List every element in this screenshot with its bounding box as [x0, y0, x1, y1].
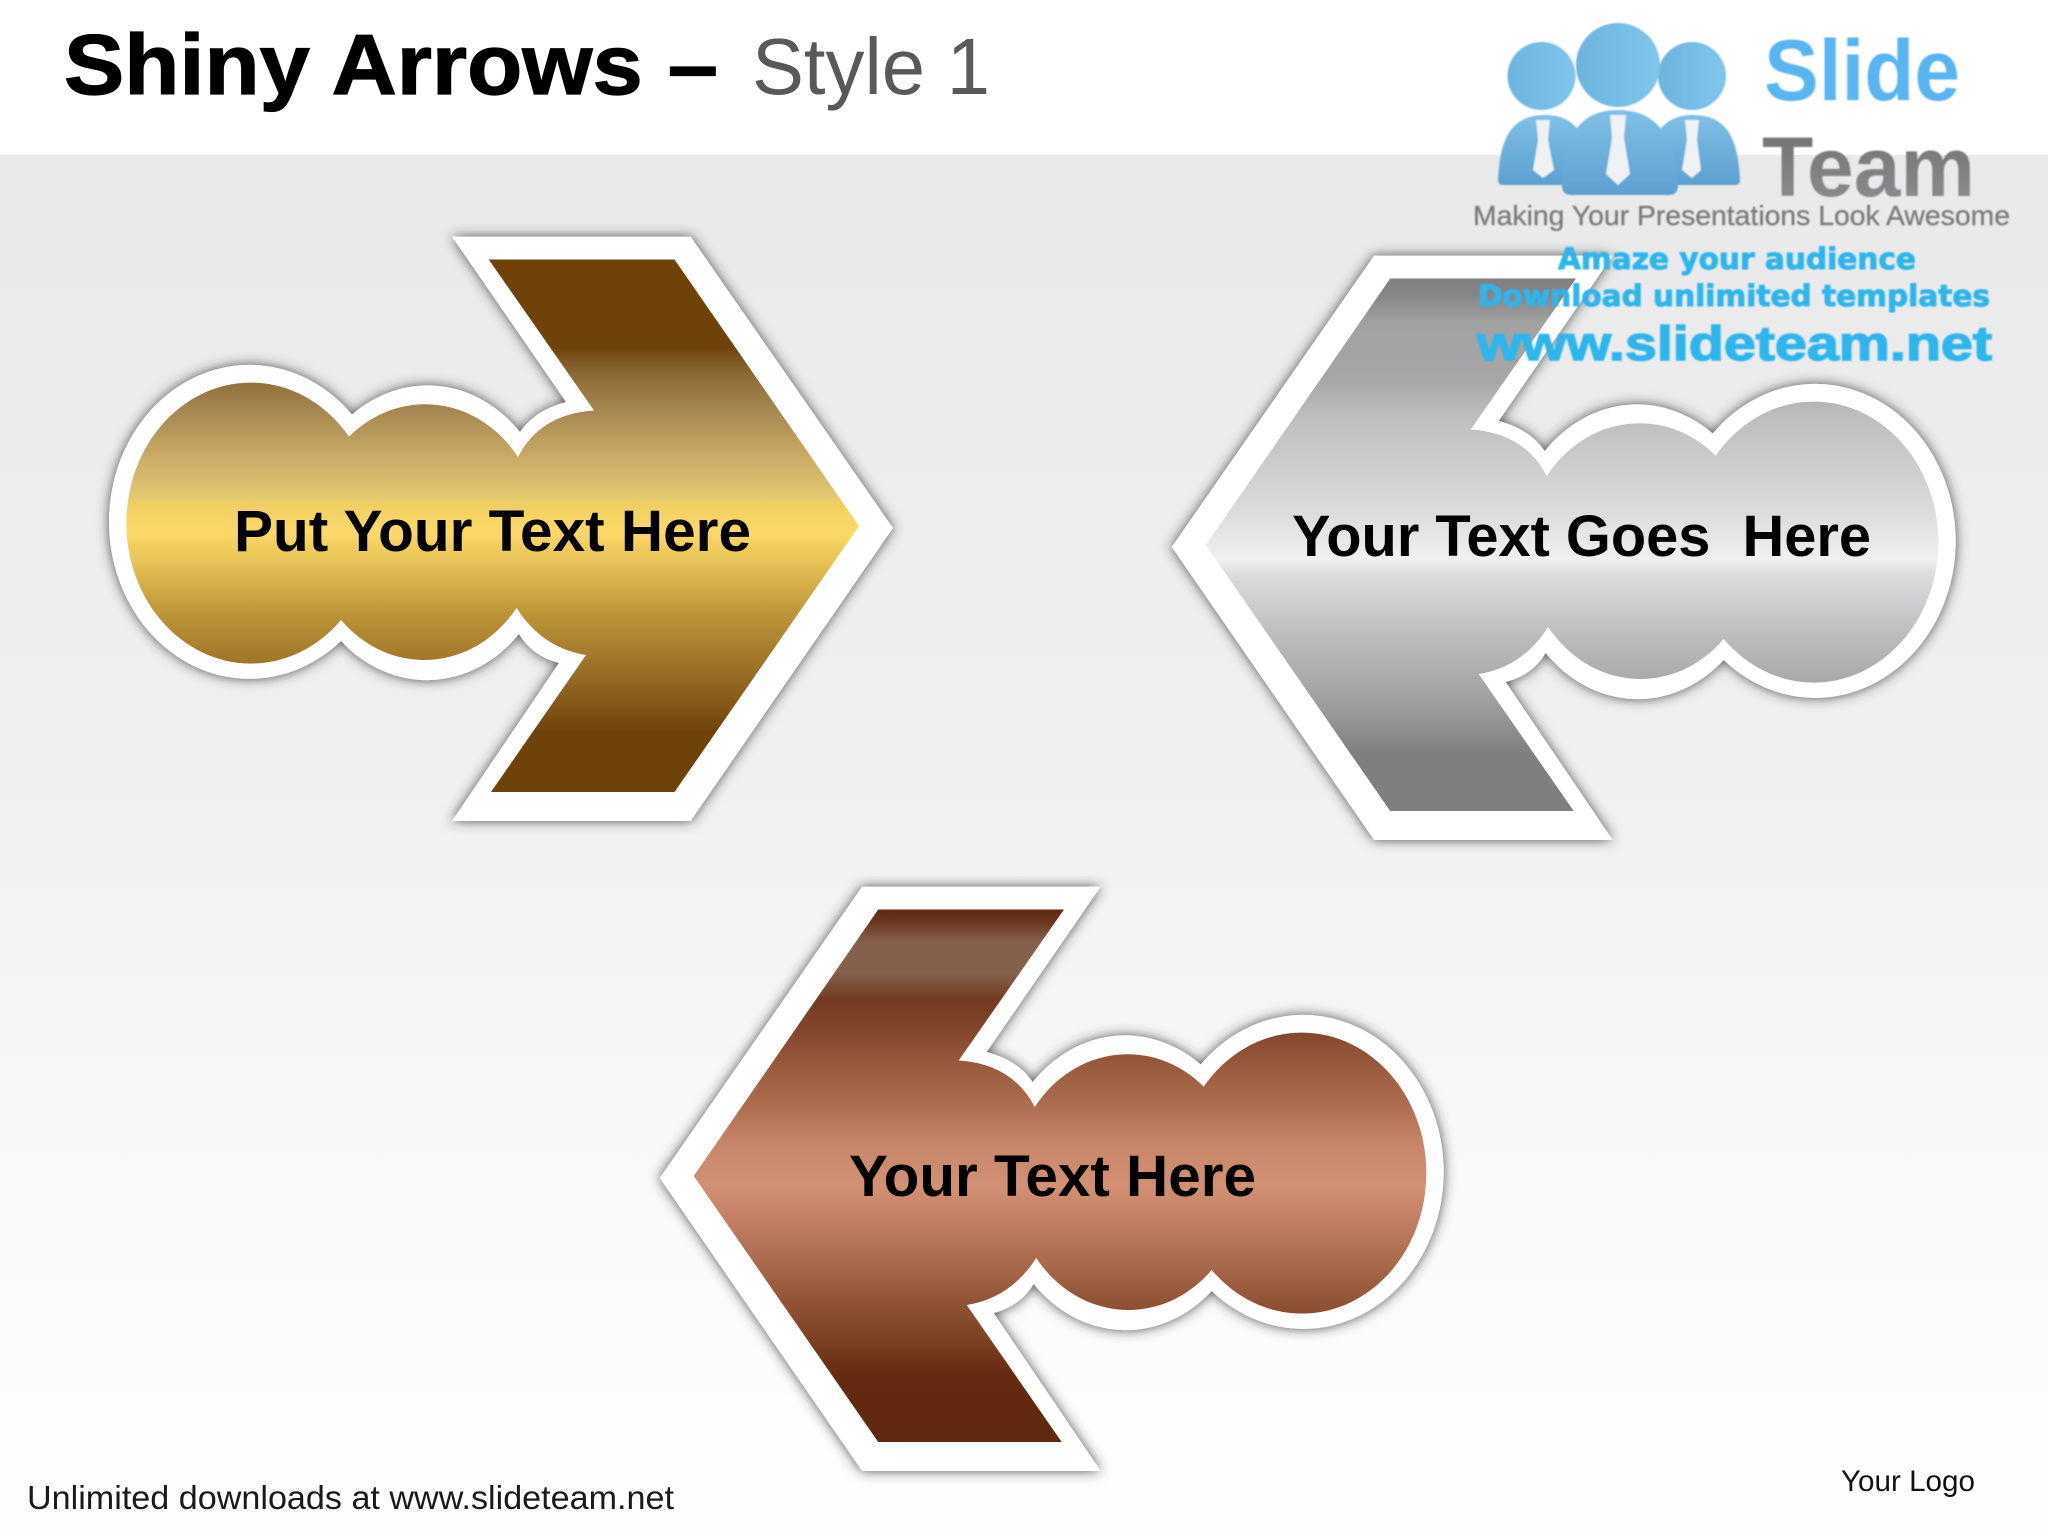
gold arrow label: Put Your Text Here: [234, 499, 751, 564]
gold arrow metallic fill: [126, 260, 859, 792]
arrow: silver pointing left: [1172, 256, 1956, 840]
watermark promo text: Download unlimited templates: [1478, 279, 1990, 313]
copper arrow white outline: [660, 887, 1444, 1471]
silver arrow metallic fill: [1206, 278, 1938, 811]
copper arrow label: Your Text Here: [849, 1144, 1256, 1209]
icon: three business people: [1498, 23, 1740, 195]
title: Shiny Arrows –: [64, 18, 718, 113]
title: [64, 18, 990, 113]
logo tagline: Making Your Presentations Look Awesome: [1473, 200, 2010, 231]
copper arrow metallic fill: [694, 910, 1426, 1442]
arrow: copper pointing left: [660, 887, 1444, 1471]
logo: Slide Team watermark: [1473, 23, 2010, 371]
logo: Slide Team watermark: Team: [1762, 120, 1975, 214]
title: Style 1: [752, 22, 990, 111]
logo wordmark: Slide: [1764, 23, 1960, 119]
silver arrow white outline: [1172, 256, 1956, 840]
watermark promo text: www.slideteam.net: [1476, 318, 1992, 371]
your logo placeholder: Your Logo: [1841, 1465, 1975, 1498]
watermark promo text: Amaze your audience: [1558, 242, 1916, 276]
silver arrow label: Your Text Goes Here: [1292, 504, 1871, 569]
arrow: gold pointing right: [109, 237, 893, 821]
gold arrow white outline: [109, 237, 893, 821]
footer text: Unlimited downloads at www.slideteam.net: [27, 1479, 674, 1516]
watermark promo text: [1476, 242, 1992, 371]
